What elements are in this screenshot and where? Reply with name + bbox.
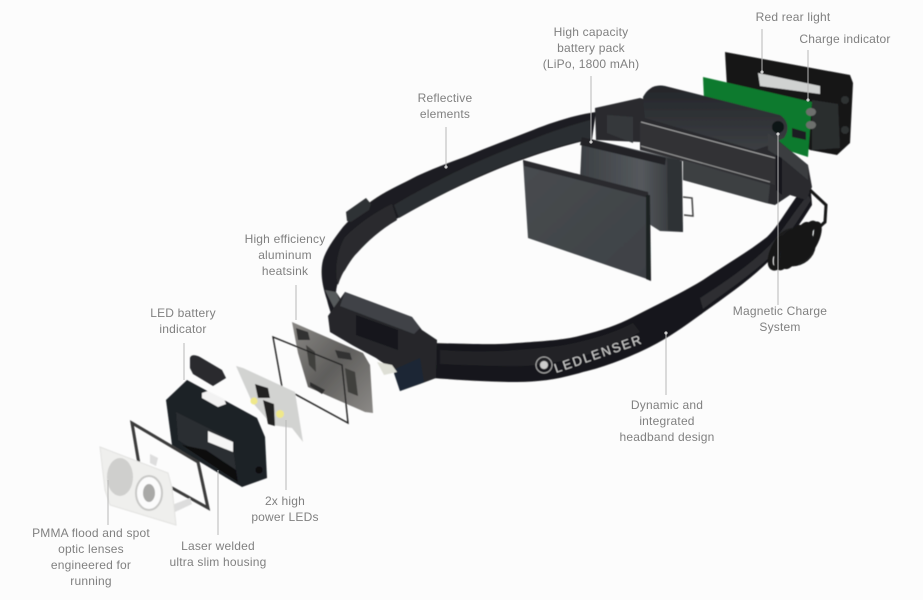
battery pod top	[643, 85, 787, 150]
headband: far strap	[322, 112, 596, 338]
label: housing: Laser welded	[181, 539, 255, 553]
front gasket	[132, 423, 208, 508]
silicone button	[190, 355, 226, 386]
rear light housing	[725, 52, 853, 155]
label: red rear light: Red rear light	[756, 10, 831, 24]
leader lines	[108, 29, 808, 535]
optic lenses	[100, 447, 192, 525]
headlamp artwork	[100, 52, 853, 525]
strap slider	[346, 198, 371, 222]
battery cell rear	[580, 137, 693, 232]
label: high power LEDs: power LEDs	[251, 510, 319, 524]
headband: front strap	[432, 180, 812, 382]
label: headband design: headband design	[619, 430, 715, 444]
label: battery pack	[543, 25, 639, 71]
label: housing: ultra slim housing	[170, 555, 266, 569]
label: headband design: integrated	[639, 414, 695, 428]
label: optic lenses: PMMA flood and spot	[32, 526, 150, 540]
leader dots	[444, 70, 810, 335]
label: magnetic charge system	[733, 304, 827, 334]
label: heatsink: High efficiency	[245, 232, 325, 246]
label: high power LEDs: 2x high	[265, 494, 305, 508]
label: heatsink: aluminum	[258, 248, 312, 262]
label: charge indicator: Charge indicator	[799, 32, 891, 46]
label: reflective elements	[418, 91, 472, 121]
label: battery pack: High capacity	[554, 25, 628, 39]
sealing gasket	[273, 337, 348, 423]
label: high power LEDs	[251, 494, 319, 524]
label: LED battery indicator	[150, 306, 216, 336]
label: headband design	[619, 398, 715, 444]
label: reflective elements: elements	[420, 107, 470, 121]
label: LED battery indicator: indicator	[159, 322, 207, 336]
label: optic lenses: optic lenses	[58, 542, 124, 556]
label: heatsink: heatsink	[262, 264, 309, 278]
LED circuit board	[236, 366, 303, 442]
ultra slim housing	[166, 380, 267, 487]
label: optic lenses: engineered for	[51, 558, 131, 572]
LEDLENSER logo: LEDLENSER	[552, 332, 645, 376]
battery cell front	[523, 160, 651, 281]
green circuit board	[703, 77, 816, 157]
label: LED battery indicator: LED battery	[150, 306, 216, 320]
battery pod and frame	[595, 85, 812, 205]
label: optic lenses: running	[70, 574, 112, 588]
label: magnetic charge system: Magnetic Charge	[733, 304, 827, 318]
front clip on headband	[328, 292, 437, 391]
label: reflective elements: Reflective	[418, 91, 472, 105]
coiled cable	[767, 190, 826, 272]
red rear light strip	[758, 73, 820, 94]
label: battery pack: battery pack	[557, 41, 626, 55]
label: housing	[170, 539, 266, 569]
label: headband design: Dynamic and	[631, 398, 703, 412]
label: battery pack: (LiPo, 1800 mAh)	[543, 57, 639, 71]
label: optic lenses	[32, 526, 150, 588]
label: heatsink	[245, 232, 325, 278]
label: magnetic charge system: System	[759, 320, 801, 334]
heatsink	[292, 322, 373, 413]
